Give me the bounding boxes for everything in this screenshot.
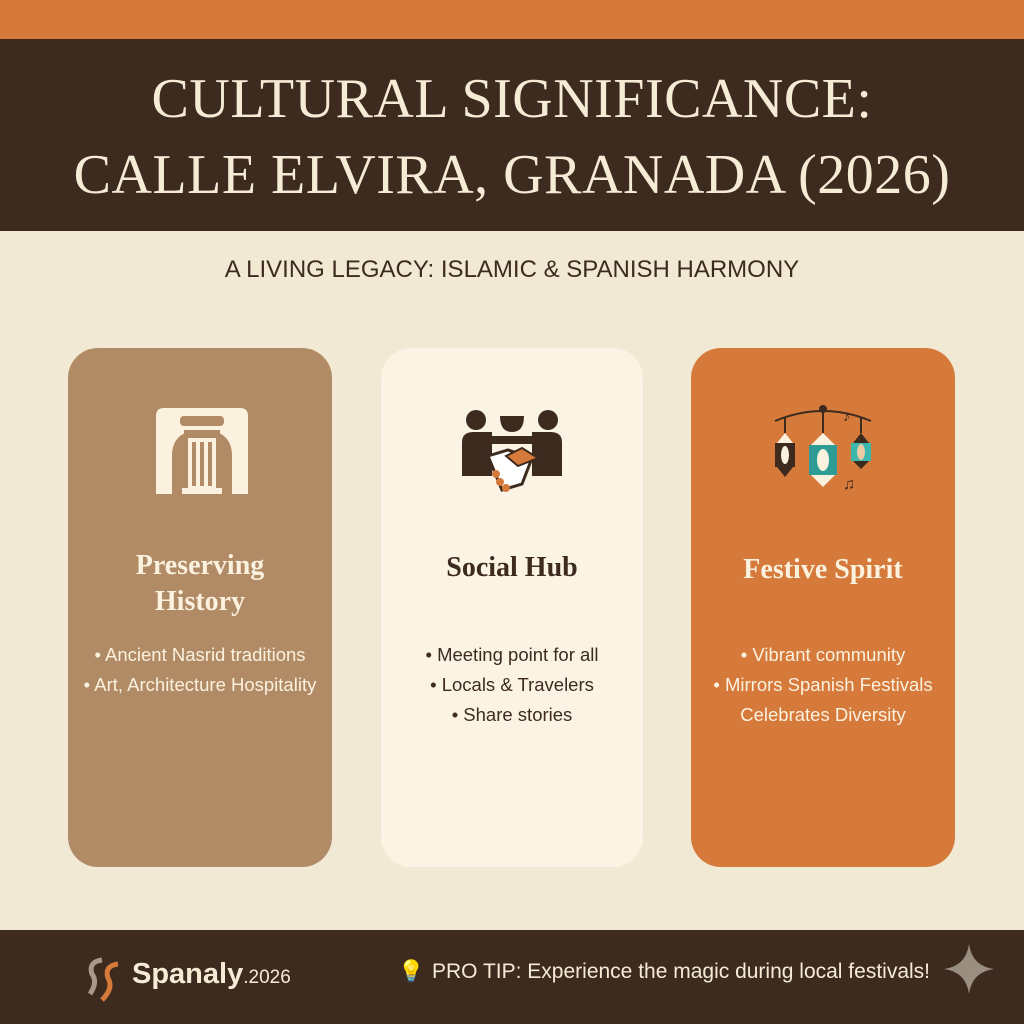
icon: column arch <box>156 408 248 494</box>
pro tip: PRO TIP: Experience the magic during local festivals! <box>432 960 930 983</box>
heading <box>136 550 264 617</box>
panel: festive spirit <box>691 348 955 867</box>
icon: sparkle <box>944 944 994 994</box>
logo: Spanaly.2026 <box>132 958 291 990</box>
title: CALLE ELVIRA, GRANADA (2026) <box>74 144 950 206</box>
heading: Social Hub <box>446 552 578 583</box>
icon: lanterns <box>774 405 872 493</box>
top stripe <box>0 0 1024 39</box>
heading: Festive Spirit <box>743 554 903 585</box>
icon: lanterns: ♫ <box>843 476 855 493</box>
icon: handshake <box>462 410 562 492</box>
heading: Preserving <box>136 550 264 581</box>
title: CULTURAL SIGNIFICANCE: <box>152 68 872 130</box>
bullets: • Vibrant community <box>741 644 905 665</box>
bullets: Celebrates Diversity <box>740 704 906 725</box>
icon: lanterns: ♪ <box>843 408 850 424</box>
title band <box>0 39 1024 231</box>
bullets: • Share stories <box>452 704 572 725</box>
footer <box>0 930 1024 1024</box>
panel: social hub <box>381 348 643 867</box>
logo <box>88 958 291 1002</box>
pro tip: 💡 <box>398 960 424 983</box>
subtitle: A LIVING LEGACY: ISLAMIC & SPANISH HARMONY <box>225 256 799 283</box>
bullets: • Art, Architecture Hospitality <box>84 674 316 695</box>
title <box>74 68 950 206</box>
bullets <box>713 644 933 725</box>
bullets: • Mirrors Spanish Festivals <box>713 674 933 695</box>
bullets <box>84 644 316 695</box>
bullets: • Meeting point for all <box>425 644 599 665</box>
bullets <box>425 644 599 725</box>
bullets: • Ancient Nasrid traditions <box>94 644 306 665</box>
panel: preserving history <box>68 348 332 867</box>
heading: History <box>155 586 245 617</box>
bullets: • Locals & Travelers <box>430 674 594 695</box>
